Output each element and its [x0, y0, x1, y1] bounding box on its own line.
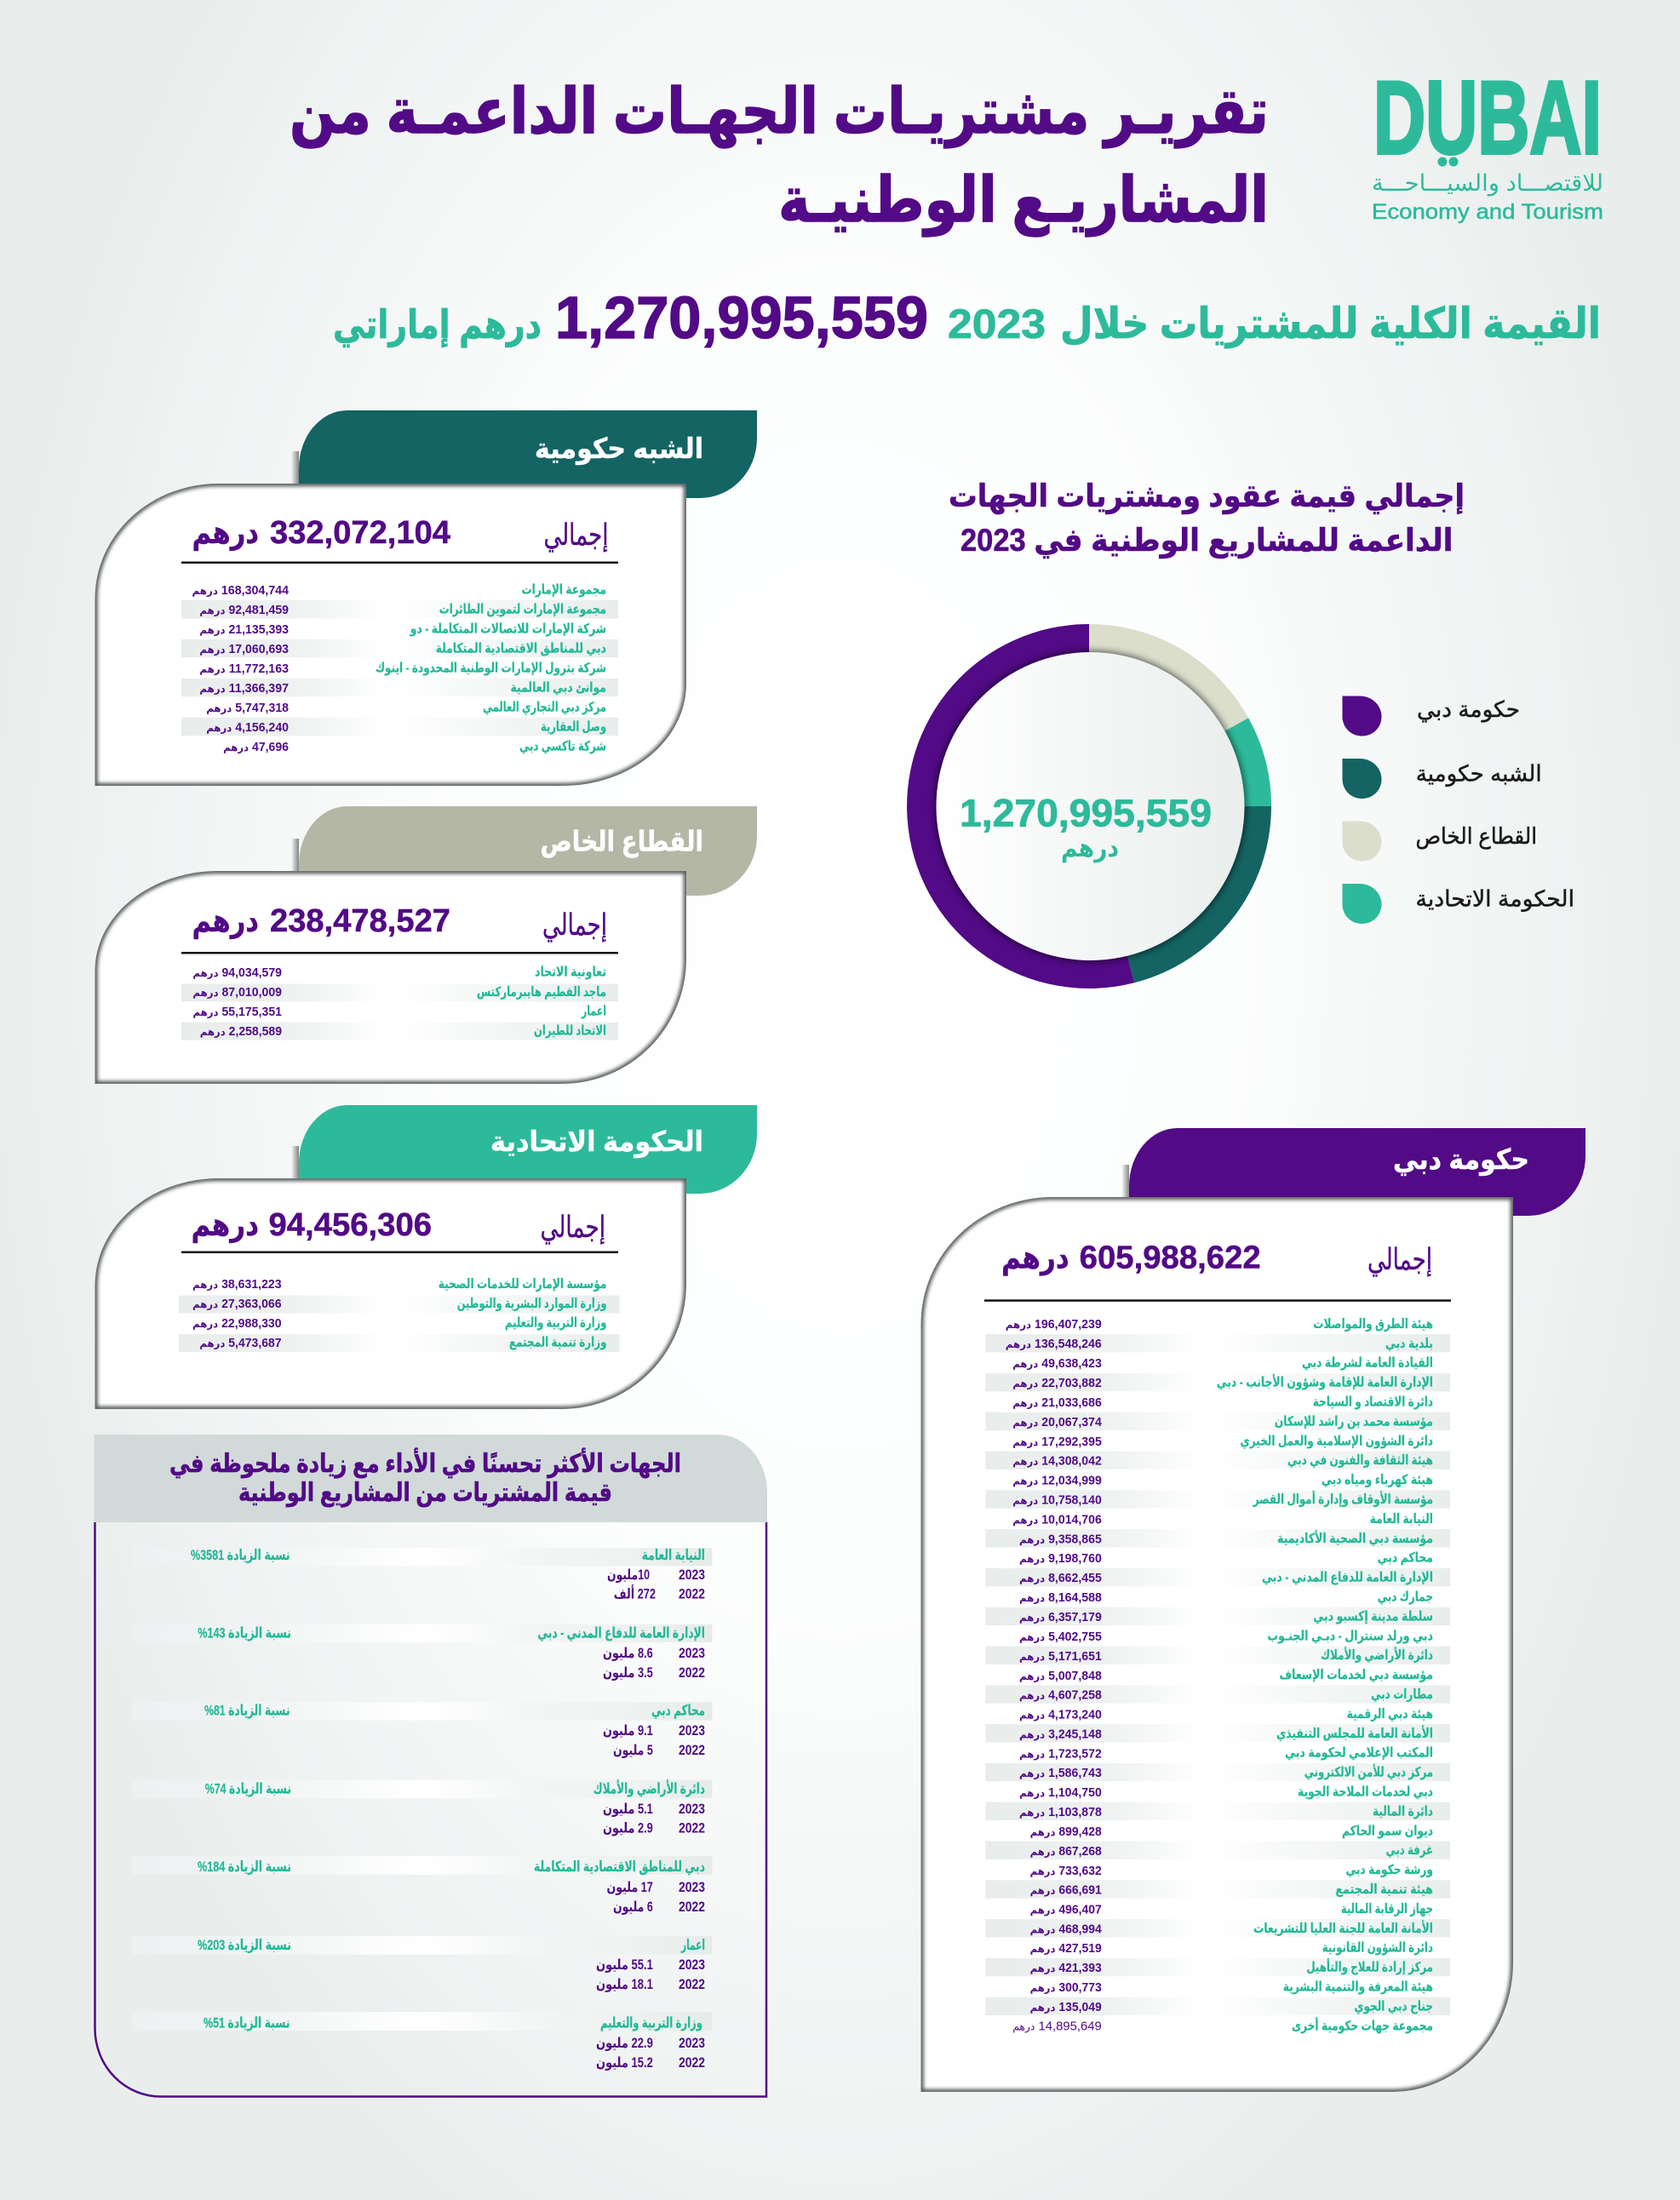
row list: مؤسسة محمد بن راشد للإسكان [1275, 1414, 1433, 1429]
row list: ديوان سمو الحاكم [1342, 1824, 1433, 1838]
chart heading [949, 478, 1465, 559]
entity: Civil Defence: 3.5 مليون [603, 1665, 653, 1682]
row list: 4,156,240 درهم [206, 720, 289, 735]
entity: Emaar: 55.1 مليون [596, 1957, 653, 1974]
row list: 496,407 درهم [1030, 1902, 1102, 1917]
row list: سلطة مدينة إكسبو دبي [1313, 1609, 1433, 1624]
row list: هيئة دبي الرقمية [1347, 1707, 1433, 1722]
total: إجمالي [1368, 1243, 1432, 1277]
row list: 867,268 درهم [1030, 1844, 1102, 1859]
card [85, 477, 698, 792]
row list [192, 583, 606, 754]
entity: Emaar: 2023 [679, 1957, 705, 1973]
section header [94, 1435, 767, 1522]
entity: Land Department: 5.1 مليون [603, 1802, 653, 1818]
row list: 92,481,459 درهم [199, 603, 289, 617]
panel: federal government [85, 1105, 757, 1414]
row list: محاكم دبي [1378, 1551, 1433, 1567]
row list: دبي ورلد سنترال - دبـي الجنـوب [1267, 1629, 1433, 1644]
entity: Emaar [132, 1936, 712, 1993]
row list [192, 1277, 606, 1350]
entity: Dubai Integrated Economic Zones [132, 1856, 712, 1916]
row list: 9,358,865 درهم [1019, 1533, 1102, 1546]
total [192, 515, 608, 553]
entity: Ministry of Education: 15.2 مليون [596, 2055, 653, 2071]
legend item: private sector: القطاع الخاص [1415, 823, 1537, 850]
entity: Dubai Integrated Economic Zones: 17 مليون [606, 1880, 653, 1896]
entity: Civil Defence: الإدارة العامة للدفاع المدني - دبي [537, 1624, 705, 1641]
legend item: semi-government [1342, 759, 1542, 799]
entity: Ministry of Education: 2023 [679, 2036, 705, 2051]
row list: المكتب الإعلامي لحكومة دبي [1285, 1746, 1433, 1762]
row list: مؤسسة الإمارات للخدمات الصحية [439, 1277, 606, 1292]
row list: 2,258,589 درهم [200, 1024, 282, 1039]
entity: Ministry of Education [132, 2012, 712, 2071]
row list: 4,607,258 درهم [1019, 1687, 1102, 1703]
section header: قيمة المشتريات من المشاريع الوطنية [238, 1479, 612, 1507]
entity: Ministry of Education: وزارة التربية والتعليم [600, 2014, 702, 2031]
row list: 5,747,318 درهم [206, 701, 289, 715]
logo: Dubai Economy and Tourism: للاقتصـــاد والسيـــاحـــة [1372, 170, 1603, 197]
row list: مركز دبي للأمن الالكتروني [1304, 1764, 1433, 1781]
entity: Land Department [132, 1779, 712, 1837]
row list: 1,586,743 درهم [1019, 1766, 1102, 1780]
row list: 300,773 درهم [1030, 1980, 1102, 1995]
row list: 14,308,042 درهم [1012, 1454, 1102, 1468]
logo: Dubai Economy and Tourism: Economy and Tourism [1372, 200, 1603, 224]
row list: 9,198,760 درهم [1019, 1551, 1102, 1566]
row list: 8,662,455 درهم [1019, 1571, 1102, 1585]
row list: وزارة تنمية المجتمع [509, 1335, 606, 1349]
entity: Land Department: 2023 [679, 1802, 705, 1817]
row list: 4,173,240 درهم [1019, 1708, 1102, 1722]
chart centre total: درهم [1061, 834, 1119, 863]
legend [1342, 696, 1574, 924]
row list: هيئة تنمية المجتمع [1335, 1882, 1433, 1897]
entity: Dubai Integrated Economic Zones: نسبة الزيادة 184% [198, 1859, 291, 1876]
total: درهم [191, 1207, 259, 1243]
row list: هيئة الطرق والمواصلات [1313, 1317, 1433, 1332]
row list: دبي للمناطق الاقتصادية المتكاملة [436, 642, 606, 657]
entity: Public Prosecution: 2023 [679, 1567, 705, 1583]
row list: شركة تاكسي دبي [519, 739, 606, 754]
legend item: federal government: الحكومة الاتحادية [1415, 885, 1574, 913]
entity: Dubai Integrated Economic Zones: دبي للمناطق الاقتصادية المتكاملة [534, 1859, 705, 1876]
entity: Dubai Integrated Economic Zones: 2023 [679, 1880, 705, 1895]
row list: موانئ دبي العالمية [511, 681, 606, 696]
entity: Civil Defence: 2022 [679, 1665, 705, 1681]
row list: الإدارة العامة للإقامة وشؤون الأجانب - دبي [1217, 1374, 1433, 1391]
row list: دائرة الاقتصاد و السياحة [1313, 1395, 1433, 1410]
logo: Dubai Economy and Tourism [1372, 60, 1603, 224]
row list: 468,994 درهم [1030, 1922, 1102, 1936]
entity: Civil Defence: نسبة الزيادة 143% [198, 1624, 291, 1641]
row list: 49,638,423 درهم [1012, 1356, 1102, 1371]
row list: 12,034,999 درهم [1012, 1473, 1102, 1488]
entity: Ministry of Education: 2022 [679, 2055, 705, 2071]
row list: 11,772,163 درهم [199, 662, 289, 676]
row list: 421,393 درهم [1030, 1961, 1102, 1975]
row list: الأمانة العامة للمجلس التنفيذي [1276, 1725, 1433, 1742]
row list: مطارات دبي [1371, 1687, 1433, 1703]
row list: جناح دبي الجوي [1354, 1999, 1433, 2014]
entity: Land Department: دائرة الأراضي والأملاك [593, 1779, 705, 1798]
row list: 3,245,148 درهم [1019, 1727, 1102, 1742]
row list: 21,135,393 درهم [199, 622, 289, 637]
entity: Dubai Courts: 2022 [679, 1743, 705, 1758]
row list: ماجد الفطيم هايبرماركتس [477, 985, 606, 1000]
row list: هيئة الثقافة والفنون في دبي [1287, 1453, 1433, 1469]
entity: Ministry of Education: نسبة الزيادة 51% [204, 2014, 290, 2031]
row list: 17,292,395 درهم [1012, 1435, 1102, 1449]
row list: 168,304,744 درهم [192, 583, 290, 598]
total: إجمالي [542, 908, 607, 942]
row list: 87,010,009 درهم [192, 985, 282, 1000]
row list: دائرة المالية [1373, 1804, 1433, 1819]
row list: تعاونية الاتحاد [535, 965, 606, 980]
row list: 47,696 درهم [223, 740, 289, 754]
total [191, 1207, 605, 1245]
row list: اعمار [581, 1005, 606, 1019]
section header: الجهات الأكثر تحسنًا في الأداء مع زيادة ملحوظة في [169, 1447, 681, 1479]
entity: Public Prosecution: 10مليون [607, 1567, 650, 1584]
row list: 22,703,882 درهم [1012, 1376, 1102, 1390]
row list: 1,103,878 درهم [1019, 1805, 1102, 1819]
row list [192, 965, 606, 1039]
row list: مؤسسة دبي الصحية الأكاديمية [1277, 1530, 1433, 1547]
row list: بلدية دبي [1385, 1337, 1433, 1352]
row list: مركز إرادة للعلاج والتأهيل [1306, 1959, 1433, 1975]
entity: Dubai Integrated Economic Zones: 2022 [679, 1899, 705, 1915]
tab: semi-government: الشبه حكومية [535, 433, 703, 466]
headline total value: 1,270,995,559 [555, 284, 928, 351]
row list: 196,407,239 درهم [1006, 1317, 1102, 1332]
row list: النيابة العامة [1370, 1512, 1433, 1527]
row list: الاتحاد للطيران [534, 1023, 606, 1039]
row list: جمارك دبي [1378, 1590, 1433, 1606]
row list: 20,067,374 درهم [1012, 1415, 1102, 1429]
tab: Dubai government: حكومة دبي [1393, 1143, 1529, 1177]
legend item: semi-government: الشبه حكومية [1416, 761, 1542, 787]
total: درهم [192, 515, 259, 551]
row list: هيئة كهرباء ومياه دبي [1322, 1473, 1433, 1488]
total [192, 903, 607, 942]
row list: 135,049 درهم [1030, 2000, 1102, 2014]
entity: Public Prosecution: 2022 [679, 1587, 705, 1602]
row list: وزارة التربية والتعليم [505, 1316, 606, 1331]
row list: دائرة الشؤون الإسلامية والعمل الخيري [1240, 1434, 1433, 1449]
tab: private sector [299, 806, 757, 896]
entity: Civil Defence: 8.6 مليون [603, 1646, 653, 1662]
entity: Civil Defence: 2023 [679, 1646, 705, 1661]
entity: Ministry of Education: 22.9 مليون [596, 2036, 653, 2052]
entity: Land Department: 2.9 مليون [603, 1820, 653, 1837]
title: تقريـر مشتريـات الجهـات الداعمـة من [290, 76, 1269, 149]
entity: Public Prosecution: 272 ألف [614, 1585, 656, 1602]
row list: مركز دبي التجاري العالمي [483, 700, 606, 715]
total: إجمالي [540, 1211, 605, 1245]
total: 94,456,306 [269, 1207, 432, 1243]
panel: semi-government [85, 410, 757, 792]
tab: federal government [299, 1105, 757, 1194]
row list: الأمانة العامة للجنة العليا للتشريعات [1253, 1920, 1433, 1936]
entity: Emaar: اعمار [680, 1937, 705, 1953]
row list: مجموعة جهات حكومية أخرى [1292, 2017, 1433, 2033]
tab: federal government: الحكومة الاتحادية [490, 1126, 703, 1159]
row list: مؤسسة الأوقاف وإدارة أموال القصر [1253, 1491, 1433, 1507]
title: المشاريـع الوطنيـة [778, 164, 1269, 238]
chart heading: إجمالي قيمة عقود ومشتريات الجهات [949, 478, 1465, 514]
legend item: Dubai government: حكومة دبي [1417, 696, 1520, 723]
tab: Dubai government [1129, 1128, 1585, 1216]
panel: Dubai government [911, 1128, 1585, 2098]
row list: 1,104,750 درهم [1019, 1785, 1102, 1800]
headline total value: 2023 [948, 302, 1046, 347]
row list: 8,164,588 درهم [1019, 1590, 1102, 1605]
entity: Dubai Courts: 9.1 مليون [603, 1723, 653, 1739]
panel: most improved entities [94, 1435, 767, 2097]
row list: 22,988,330 درهم [192, 1316, 282, 1331]
row list: غرفة دبي [1386, 1843, 1433, 1859]
card [85, 1172, 698, 1414]
tab: semi-government [299, 410, 757, 498]
row list: 10,014,706 درهم [1012, 1512, 1102, 1527]
row list: القيادة العامة لشرطة دبي [1302, 1356, 1433, 1372]
title [290, 76, 1269, 238]
row list: 427,519 درهم [1030, 1941, 1102, 1956]
row list: وزارة الموارد البشرية والتوطين [457, 1297, 606, 1311]
chart heading: الداعمة للمشاريع الوطنية في 2023 [960, 523, 1453, 559]
row list: دبي لخدمات الملاحة الجوية [1298, 1785, 1433, 1800]
row list: ورشة حكومة دبي [1345, 1863, 1433, 1878]
legend item: Dubai government [1342, 696, 1520, 736]
row list [1006, 1317, 1433, 2033]
entity: Emaar: 18.1 مليون [596, 1977, 653, 1993]
legend item: private sector [1342, 821, 1537, 862]
entity: Public Prosecution: النيابة العامة [642, 1547, 705, 1563]
tab: private sector: القطاع الخاص [540, 826, 703, 858]
row list: دائرة الأراضي والأملاك [1321, 1647, 1433, 1664]
row list: هيئة المعرفة والتنمية البشرية [1283, 1980, 1433, 1994]
row list: 10,758,140 درهم [1012, 1493, 1102, 1507]
panel: private sector [85, 806, 757, 1090]
row list: 1,723,572 درهم [1019, 1747, 1102, 1761]
row list: 5,473,687 درهم [199, 1336, 282, 1350]
row list: 5,007,848 درهم [1019, 1669, 1102, 1683]
entity: Emaar: نسبة الزيادة 203% [198, 1937, 291, 1954]
chart centre total [960, 792, 1212, 863]
total: إجمالي [543, 518, 608, 553]
row list: 17,060,693 درهم [199, 642, 289, 656]
row list: مجموعة الإمارات لتموين الطائرات [439, 603, 606, 617]
entity: Dubai Courts: 5 مليون [613, 1743, 653, 1759]
entity: Dubai Integrated Economic Zones: 6 مليون [613, 1899, 653, 1916]
row list: 11,366,397 درهم [199, 681, 289, 696]
row list: 27,363,066 درهم [192, 1297, 282, 1311]
chart centre total: 1,270,995,559 [960, 792, 1212, 834]
entity: Land Department: نسبة الزيادة 74% [205, 1781, 291, 1798]
entity: Public Prosecution [132, 1547, 712, 1602]
headline total value [333, 284, 1601, 351]
donut chart [907, 624, 1271, 988]
row list: 5,171,651 درهم [1019, 1649, 1102, 1664]
row list: 94,034,579 درهم [192, 965, 282, 980]
card [85, 864, 698, 1090]
row list: 38,631,223 درهم [192, 1277, 282, 1292]
row list: الإدارة العامة للدفاع المدني - دبي [1262, 1571, 1433, 1586]
total [1001, 1240, 1432, 1277]
total: درهم [1001, 1240, 1069, 1276]
row list: شركة بترول الإمارات الوطنية المحدودة - اينوك [376, 662, 606, 676]
row list: 14,895,649 درهم [1012, 2020, 1102, 2033]
row list: جهاز الرقابة المالية [1341, 1902, 1433, 1916]
total: درهم [192, 903, 259, 939]
row list: وصل العقارية [541, 720, 606, 734]
row list: مؤسسة دبي لخدمات الإسعاف [1279, 1668, 1433, 1683]
entity: Land Department: 2022 [679, 1820, 705, 1836]
row list: 666,691 درهم [1030, 1883, 1102, 1897]
row list: شركة الإمارات للاتصالات المتكاملة - دو [410, 622, 606, 637]
row list: 899,428 درهم [1030, 1825, 1102, 1839]
legend item: federal government [1342, 884, 1574, 924]
entity: Dubai Courts: محاكم دبي [651, 1703, 705, 1720]
headline total value: درهم إماراتي [333, 302, 542, 348]
row list: مجموعة الإمارات [521, 583, 606, 598]
row list: 136,548,246 درهم [1006, 1337, 1102, 1351]
row list: 733,632 درهم [1030, 1864, 1102, 1878]
total: 238,478,527 [270, 903, 450, 939]
row list: 21,033,686 درهم [1012, 1395, 1102, 1410]
entity: Dubai Courts: نسبة الزيادة 81% [204, 1703, 290, 1720]
total: 605,988,622 [1080, 1240, 1261, 1276]
headline total value: القيمة الكلية للمشتريات خلال [1060, 300, 1601, 349]
total: 332,072,104 [270, 515, 450, 551]
entity: Dubai Courts: 2023 [679, 1723, 705, 1739]
row list: دائرة الشؤون القانونية [1322, 1941, 1433, 1956]
entity: Dubai Courts [132, 1702, 712, 1759]
row list: 55,175,351 درهم [192, 1005, 282, 1019]
card [911, 1190, 1524, 2098]
row list: 6,357,179 درهم [1019, 1610, 1102, 1624]
entity: Civil Defence [132, 1624, 712, 1682]
row list: 5,402,755 درهم [1019, 1630, 1102, 1644]
entity: Public Prosecution: نسبة الزيادة 3581% [191, 1547, 290, 1564]
entity: Emaar: 2022 [679, 1977, 705, 1992]
